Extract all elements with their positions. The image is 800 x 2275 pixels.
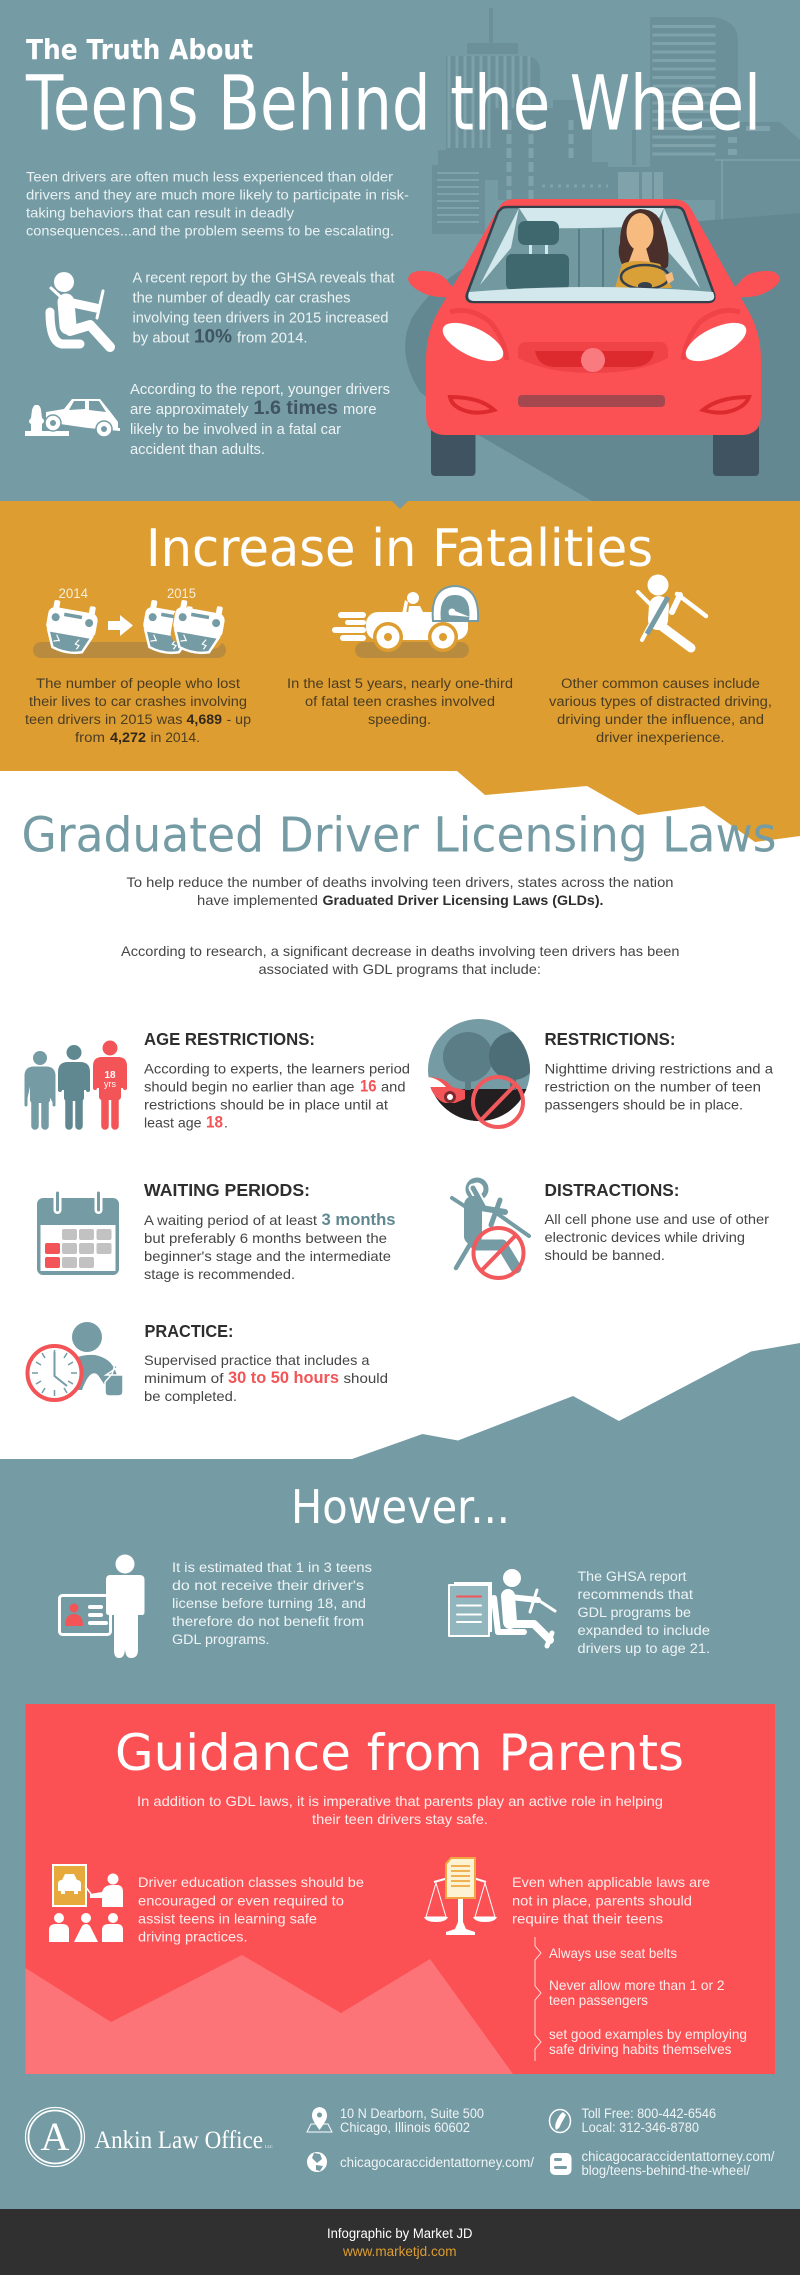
text: one in three: [172, 1560, 372, 1647]
text: GDL intro: According to research, a significant decrease in deaths involving teen drivers has been: [121, 943, 680, 959]
item: age restrictions: and: [381, 1078, 406, 1094]
headlights: [437, 315, 752, 369]
city skyline: [432, 8, 800, 234]
text: GHSA recommendation: The GHSA report: [578, 1569, 687, 1584]
logo: Ankin Law Office: LLC: [265, 2144, 273, 2149]
icon: phone: [550, 2110, 570, 2132]
intro text: consequences...and the problem seems to be escalating.: [26, 222, 394, 238]
logo: Ankin Law Office: A: [41, 2114, 70, 2159]
icon: no night driving: [428, 1019, 530, 1129]
icon: clock and driver thumbs up: [28, 1322, 123, 1400]
text: fatalities numbers: 4,272: [110, 730, 146, 745]
item: practice: Supervised practice that includes a: [144, 1352, 370, 1368]
heading: guidance from parents: Guidance from Parents: [115, 1724, 684, 1782]
hood creases: [450, 310, 740, 360]
text: other causes: driver inexperience.: [596, 730, 724, 745]
stat: one point six times: likely to be involved in a fatal car: [130, 422, 341, 438]
person three: yrs: [104, 1079, 116, 1089]
text: driver education: Driver education classes should be: [138, 1874, 364, 1890]
text: when laws not in place: not in place, parents should: [512, 1892, 692, 1908]
icon: no phone distraction: [452, 1180, 529, 1278]
person one: [26, 1051, 54, 1126]
intro text: Teen drivers are often much less experienced than older: [26, 168, 393, 184]
list: parent rules: safe driving habits themselves: [549, 2041, 732, 2057]
item: waiting periods: 3 months: [322, 1210, 396, 1229]
car body: [426, 199, 761, 435]
panel: header background: [0, 0, 800, 510]
grille: [518, 342, 668, 373]
icon: flipped cars 2014 vs 2015: 2014: [58, 585, 88, 601]
text: one in three: GDL programs.: [172, 1632, 270, 1647]
heading: graduated driver licensing laws: Graduated Driver Licensing Laws: [22, 808, 776, 864]
item: restrictions: RESTRICTIONS:: [544, 1029, 676, 1049]
item: waiting periods: WAITING PERIODS:: [144, 1180, 310, 1200]
text: other causes: driving under the influence, and: [557, 712, 764, 727]
text: when laws not in place: Even when applicable laws are: [512, 1874, 710, 1890]
icon: three people by age: [26, 1040, 125, 1126]
icon: map pin: [307, 2107, 332, 2132]
text: driver education: driving practices.: [138, 1928, 248, 1944]
icon: person and license card: [60, 1554, 144, 1658]
item: restrictions: passengers should be in place.: [544, 1096, 743, 1112]
text: fatalities numbers: - up: [226, 712, 251, 727]
dashboard: [469, 287, 714, 301]
stat: one point six times: 1.6 times: [254, 398, 338, 419]
contact: blog address: chicagocaraccidentattorney.com/: [582, 2149, 775, 2164]
text: GHSA recommendation: recommends that: [578, 1587, 693, 1602]
item: distractions: electronic devices while driving: [544, 1229, 745, 1245]
text: speeding: of fatal teen crashes involved: [305, 694, 495, 709]
text: driver education: [138, 1874, 364, 1944]
stat: ten percent: from 2014.: [237, 330, 308, 346]
text: parent role intro: [137, 1793, 663, 1827]
contact: address: [340, 2106, 484, 2135]
text: parent role intro: their teen drivers stay safe.: [312, 1811, 488, 1827]
list: parent rules: [549, 1945, 747, 2057]
stat: ten percent: A recent report by the GHSA reveals that: [132, 270, 394, 286]
heading: increase in fatalities: Increase in Fatalities: [146, 519, 653, 579]
item: distractions: [544, 1180, 769, 1263]
list: parent rules: set good examples by employing: [549, 2026, 747, 2042]
text: speeding: [287, 676, 513, 727]
woman driver: [615, 209, 674, 290]
windshield: [467, 207, 714, 302]
item: waiting periods: but preferably 6 months between the: [144, 1230, 387, 1246]
item: practice: PRACTICE:: [144, 1321, 234, 1341]
person three: 18: [104, 1070, 116, 1081]
text: fatalities numbers: teen drivers in 2015 was: [25, 712, 183, 727]
text: GDL intro: have implemented: [197, 892, 318, 908]
footer bar: Infographic by Market JD: [327, 2226, 473, 2241]
footer bar: [0, 2209, 800, 2275]
text: fatalities numbers: [25, 676, 251, 745]
stat: ten percent: [132, 270, 394, 348]
text: fatalities numbers: their lives to car crashes involving: [29, 694, 247, 709]
item: practice: minimum of: [144, 1370, 224, 1386]
icon: calendar: [37, 1193, 119, 1275]
text: GHSA recommendation: drivers up to age 21.: [578, 1641, 710, 1656]
number plate: [518, 395, 665, 407]
item: restrictions: restriction on the number of teen: [544, 1078, 761, 1094]
logo: Ankin Law Office: [26, 2108, 273, 2166]
stat: one point six times: more: [343, 402, 376, 418]
decorative mountain shape: [26, 1955, 513, 2074]
text: GDL intro: [121, 874, 680, 977]
text: other causes: [549, 676, 772, 745]
wheels: [431, 420, 759, 476]
stat: ten percent: by about: [132, 330, 190, 346]
text: GDL intro: To help reduce the number of deaths involving teen drivers, states across the nation: [126, 874, 674, 890]
item: age restrictions: [144, 1029, 410, 1132]
text: GDL intro: Graduated Driver Licensing Laws (GLDs).: [322, 892, 604, 908]
title: The Truth About: [26, 33, 253, 66]
item: age restrictions: 16: [360, 1076, 376, 1096]
item: age restrictions: least age: [144, 1114, 202, 1130]
panel: guidance from parents: [26, 1704, 775, 2074]
item: restrictions: Nighttime driving restrictions and a: [544, 1060, 773, 1076]
contact: address: Chicago, Illinois 60602: [340, 2120, 470, 2135]
item: age restrictions: should begin no earlier than age: [144, 1078, 355, 1094]
text: GDL intro: associated with GDL programs that include:: [258, 961, 541, 977]
text: GHSA recommendation: expanded to include: [578, 1623, 710, 1638]
stat: one point six times: accident than adults.: [130, 442, 265, 458]
fog lights: [450, 397, 749, 413]
item: waiting periods: beginner's stage and the intermediate: [144, 1248, 391, 1264]
panel: increase in fatalities background: [0, 501, 800, 842]
item: age restrictions: AGE RESTRICTIONS:: [144, 1029, 315, 1049]
text: driver education: encouraged or even required to: [138, 1892, 344, 1908]
stat: ten percent: 10%: [194, 326, 232, 348]
contact: phone numbers: Toll Free: 800-442-6546: [582, 2106, 716, 2121]
text: GHSA recommendation: [578, 1569, 710, 1656]
text: other causes: various types of distracted driving,: [549, 694, 772, 709]
text: fatalities numbers: in 2014.: [150, 730, 200, 745]
intro text: [26, 168, 409, 238]
panel: however background: [0, 1343, 800, 2210]
intro text: taking behaviors that can result in deadly: [26, 204, 294, 220]
icon: driver with seat belt: [638, 574, 706, 648]
text: one in three: therefore do not benefit from: [172, 1614, 364, 1629]
mirrors: [408, 271, 780, 297]
bracket: rule list: [535, 1937, 541, 2061]
text: when laws not in place: require that their teens: [512, 1910, 663, 1926]
contact: blog address: blog/teens-behind-the-wheel/: [582, 2163, 750, 2178]
item: distractions: DISTRACTIONS:: [544, 1180, 680, 1200]
text: speeding: speeding.: [368, 712, 431, 727]
icon: blog: [550, 2153, 572, 2175]
item: waiting periods: [144, 1180, 396, 1282]
contact: phone numbers: [582, 2106, 716, 2135]
contact: website: chicagocaraccidentattorney.com/: [340, 2155, 534, 2170]
text: fatalities numbers: from: [75, 730, 105, 745]
stat: one point six times: According to the report, younger drivers: [130, 382, 390, 398]
item: waiting periods: stage is recommended.: [144, 1266, 295, 1282]
stat: ten percent: involving teen drivers in 2015 increased: [132, 310, 388, 326]
item: distractions: All cell phone use and use of other: [544, 1211, 769, 1227]
icon: flipped cars 2014 vs 2015: 2015: [167, 585, 196, 601]
item: age restrictions: According to experts, the learners period: [144, 1060, 410, 1076]
stat: one point six times: [130, 382, 390, 458]
text: other causes: Other common causes include: [561, 676, 760, 691]
text: one in three: license before turning 18, and: [172, 1596, 366, 1611]
text: one in three: do not receive their driver's: [172, 1578, 364, 1593]
item: distractions: should be banned.: [544, 1247, 665, 1263]
item: practice: 30 to 50 hours: [228, 1368, 339, 1387]
icon: classroom: [49, 1865, 123, 1942]
list: parent rules: Always use seat belts: [549, 1945, 677, 1961]
footer bar: www.marketjd.com: [342, 2244, 456, 2259]
item: waiting periods: A waiting period of at least: [144, 1212, 317, 1228]
item: practice: [144, 1321, 388, 1404]
road: [405, 213, 800, 501]
item: age restrictions: 18: [206, 1112, 223, 1132]
contact: address: 10 N Dearborn, Suite 500: [340, 2106, 484, 2121]
icon: documents and driver: [449, 1569, 555, 1646]
list: parent rules: teen passengers: [549, 1992, 648, 2008]
person two: [60, 1045, 88, 1126]
text: one in three: It is estimated that 1 in 3 teens: [172, 1560, 372, 1575]
text: parent role intro: In addition to GDL laws, it is imperative that parents play an active role in helping: [137, 1793, 663, 1809]
illustration: red car with teen driver: [408, 199, 780, 476]
intro text: drivers and they are much more likely to participate in risk-: [26, 186, 409, 202]
item: age restrictions: restrictions should be in place until at: [144, 1096, 388, 1112]
driver seat: [506, 221, 569, 290]
icon: driver with seat belt: [50, 272, 110, 347]
text: GHSA recommendation: GDL programs be: [578, 1605, 691, 1620]
icon: car crashed into hydrant: [25, 399, 120, 437]
item: age restrictions: .: [224, 1114, 228, 1130]
icon: flipped cars 2014 vs 2015: [33, 585, 227, 658]
stat: ten percent: the number of deadly car crashes: [132, 290, 350, 306]
text: fatalities numbers: The number of people who lost: [36, 676, 240, 691]
person three: [95, 1040, 125, 1126]
contact: phone numbers: Local: 312-346-8780: [582, 2120, 699, 2135]
item: restrictions: [544, 1029, 773, 1112]
icon: globe: [307, 2152, 327, 2172]
list: parent rules: Never allow more than 1 or 2: [549, 1977, 725, 1993]
icon: speeding car with gauge: [332, 586, 478, 658]
text: driver education: assist teens in learning safe: [138, 1910, 317, 1926]
contact: blog address: [582, 2149, 775, 2178]
item: practice: be completed.: [144, 1388, 237, 1404]
heading: however: However...: [291, 1480, 510, 1534]
text: fatalities numbers: 4,689: [186, 712, 222, 727]
stat: one point six times: are approximately: [130, 402, 249, 418]
text: speeding: In the last 5 years, nearly one-third: [287, 676, 513, 691]
item: practice: should: [344, 1370, 388, 1386]
logo: Ankin Law Office: Ankin Law Office: [94, 2127, 263, 2154]
text: when laws not in place: [512, 1874, 710, 1926]
icon: scales of justice with document: [424, 1858, 497, 1935]
